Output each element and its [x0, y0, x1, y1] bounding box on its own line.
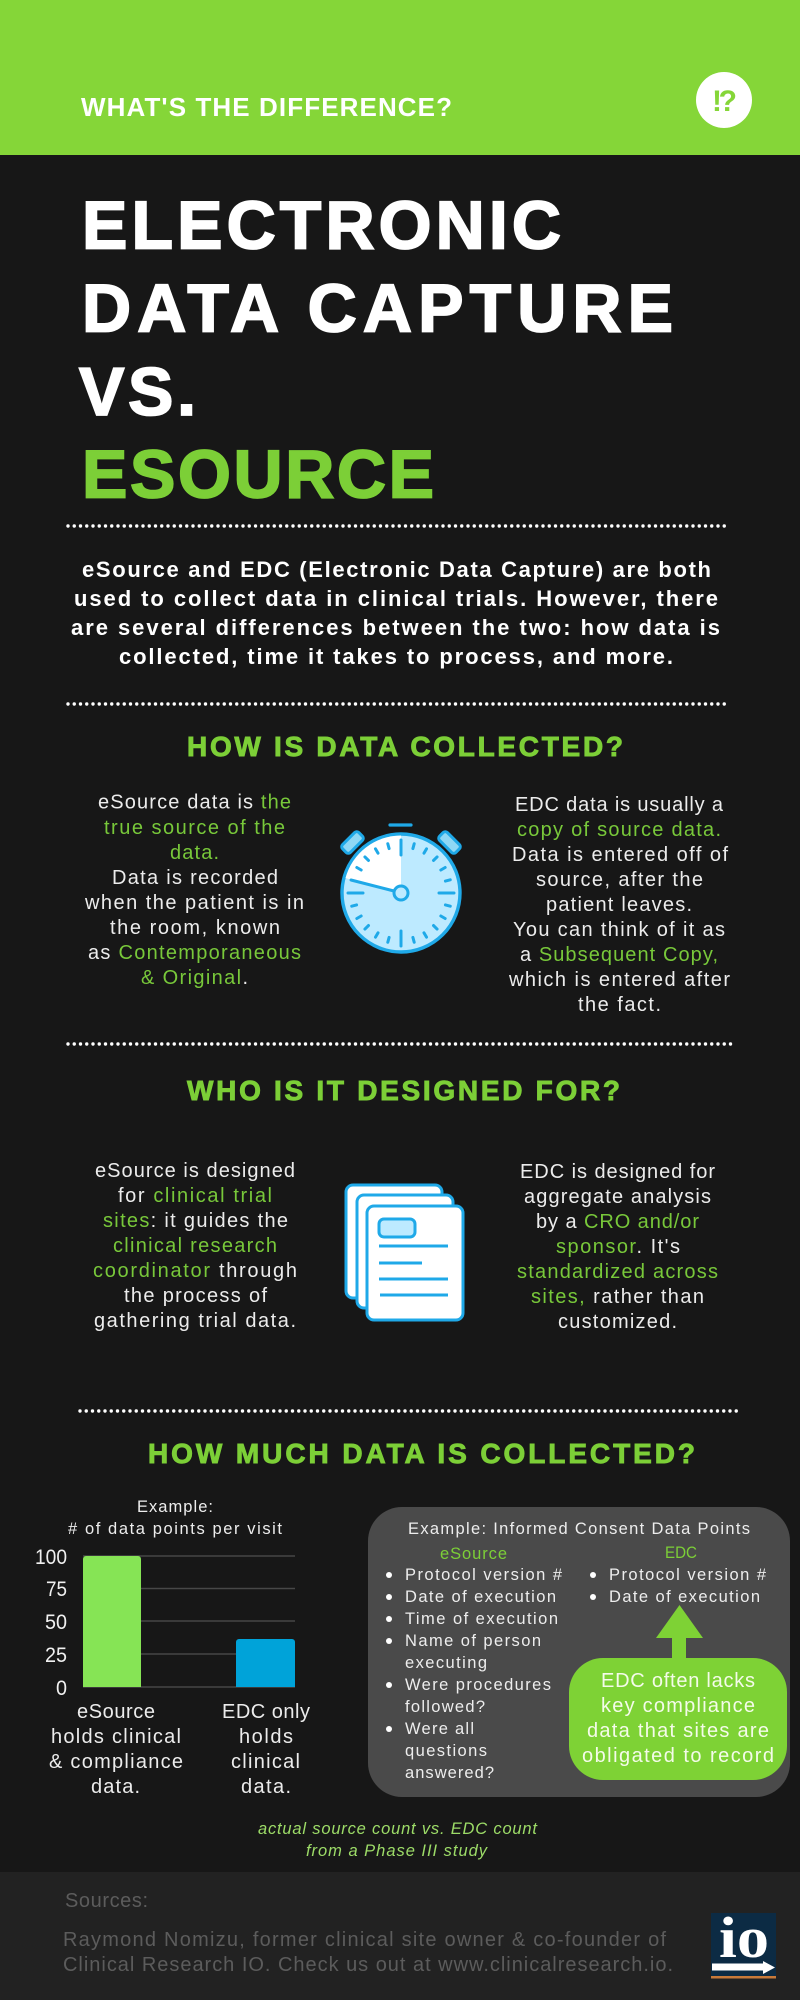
text block: eSource audience: gathering trial data.	[94, 1310, 296, 1332]
list: EDC data points: Date of execution	[609, 1588, 760, 1606]
list: EDC data points	[590, 1566, 767, 1606]
bar label: EDC: data.	[241, 1776, 291, 1798]
axis labels	[35, 1546, 67, 1700]
list: eSource data points: questions	[405, 1742, 487, 1760]
icon: exclamation question badge: !?	[712, 85, 737, 118]
main title: ESOURCE	[82, 436, 434, 512]
callout: EDC lacks compliance data: data that sites are	[587, 1720, 769, 1742]
axis labels: 75	[46, 1578, 67, 1601]
column heading: eSource: eSource	[440, 1545, 507, 1563]
text block: eSource data collection: the room, known	[110, 917, 280, 939]
text block: EDC data collection: EDC data is usually a	[515, 794, 724, 816]
text block: eSource data collection: Data is recorded	[112, 867, 278, 889]
bar label: eSource: data.	[91, 1776, 140, 1798]
text block: EDC audience: aggregate analysis	[524, 1186, 711, 1208]
text block: eSource data collection: data.	[170, 842, 219, 864]
bar label: EDC: holds	[239, 1726, 293, 1748]
chart caption	[68, 1498, 282, 1538]
panel title: Example: Informed Consent Data Points	[408, 1520, 750, 1538]
list: eSource data points: executing	[405, 1654, 487, 1672]
text block: eSource audience	[93, 1160, 297, 1332]
list: eSource data points: answered?	[405, 1764, 494, 1782]
text block: EDC audience: sites, rather than	[531, 1286, 704, 1308]
axis labels: 25	[45, 1644, 67, 1667]
text block: eSource data collection: when the patient is in	[84, 892, 304, 914]
header band	[0, 0, 800, 155]
chart footnote	[258, 1820, 538, 1860]
chart caption: # of data points per visit	[68, 1520, 282, 1538]
list: eSource data points: followed?	[405, 1698, 485, 1716]
axis labels: 0	[56, 1677, 67, 1700]
arrow: up to EDC list	[656, 1605, 703, 1660]
text block: EDC data collection: the fact.	[578, 994, 661, 1016]
text block: eSource audience: the process of	[124, 1285, 267, 1307]
text block: eSource audience: clinical research	[113, 1235, 277, 1257]
sources text	[63, 1890, 673, 1976]
main title: DATA CAPTURE	[82, 270, 673, 346]
text block: eSource data collection: true source of the	[104, 817, 285, 839]
panel: informed consent data points	[368, 1507, 790, 1797]
icon: clinical research io logo: io	[719, 1905, 769, 1970]
heading: who is it designed for: WHO IS IT DESIGNED FOR?	[187, 1075, 620, 1106]
callout: EDC lacks compliance data	[569, 1658, 787, 1780]
text block: eSource data collection: as Contemporaneous	[88, 942, 301, 964]
text block: EDC audience	[517, 1161, 718, 1333]
text block: EDC data collection: You can think of it as	[513, 919, 725, 941]
chart caption: Example:	[137, 1498, 213, 1516]
text block: eSource audience: coordinator through	[93, 1260, 297, 1282]
text block: EDC data collection: copy of source data.	[517, 819, 721, 841]
axis labels: 100	[35, 1546, 67, 1569]
bar label: eSource	[49, 1701, 183, 1798]
intro paragraph: eSource and EDC (Electronic Data Capture) are both	[82, 557, 711, 582]
main title: ELECTRONIC	[82, 188, 561, 264]
bar: EDC	[236, 1639, 295, 1687]
text block: eSource audience: sites: it guides the	[103, 1210, 288, 1232]
icon: stopwatch	[340, 825, 462, 952]
axis labels: 50	[45, 1611, 67, 1634]
heading: how much data is collected: HOW MUCH DATA IS COLLECTED?	[148, 1438, 695, 1469]
text block: EDC audience: EDC is designed for	[520, 1161, 715, 1183]
bar label: EDC	[222, 1701, 310, 1798]
bar label: EDC: clinical	[231, 1751, 300, 1773]
icon: clinical research io logo	[711, 1905, 776, 1978]
text block: EDC data collection: which is entered after	[508, 969, 730, 991]
intro paragraph	[71, 557, 720, 669]
text block: eSource data collection	[84, 792, 304, 989]
text block: EDC data collection: patient leaves.	[546, 894, 692, 916]
list: eSource data points: Date of execution	[405, 1588, 556, 1606]
intro paragraph: are several differences between the two: how data is	[71, 615, 720, 640]
main title	[79, 188, 673, 512]
list: eSource data points: Were procedures	[405, 1676, 551, 1694]
column heading: EDC: EDC	[665, 1544, 697, 1562]
text block: eSource audience: for clinical trial	[118, 1185, 272, 1207]
text block: EDC audience: standardized across	[517, 1261, 718, 1283]
intro paragraph: used to collect data in clinical trials. However, there	[74, 586, 718, 611]
bar label: eSource: & compliance	[49, 1751, 183, 1773]
bar label: eSource: eSource	[77, 1701, 155, 1723]
list: eSource data points: Name of person	[405, 1632, 541, 1650]
text block: eSource data collection: eSource data is the	[98, 792, 291, 814]
footer	[0, 1872, 800, 2000]
text block: EDC data collection: a Subsequent Copy,	[520, 944, 718, 966]
chart footnote: actual source count vs. EDC count	[258, 1820, 538, 1838]
text block: eSource data collection: & Original.	[141, 967, 248, 989]
bar: eSource	[83, 1556, 141, 1687]
sources text: Sources:	[65, 1890, 148, 1912]
main title: VS.	[79, 354, 196, 430]
bar label: EDC: EDC only	[222, 1701, 310, 1723]
intro paragraph: collected, time it takes to process, and more.	[119, 644, 673, 669]
list: eSource data points: Protocol version #	[405, 1566, 563, 1584]
icon: exclamation question badge	[696, 72, 752, 128]
text block: EDC audience: customized.	[558, 1311, 677, 1333]
list: eSource data points: Time of execution	[405, 1610, 558, 1628]
kicker heading: WHAT'S THE DIFFERENCE?	[81, 92, 452, 122]
list: eSource data points	[386, 1566, 563, 1782]
list: eSource data points: Were all	[405, 1720, 474, 1738]
text block: eSource audience: eSource is designed	[95, 1160, 295, 1182]
text block: EDC data collection: source, after the	[536, 869, 703, 891]
sources text: Raymond Nomizu, former clinical site owner & co-founder of	[63, 1929, 666, 1951]
text block: EDC data collection	[508, 794, 730, 1016]
chart footnote: from a Phase III study	[306, 1842, 489, 1860]
callout: EDC lacks compliance data: key compliance	[601, 1695, 755, 1717]
bar label: eSource: holds clinical	[51, 1726, 181, 1748]
text block: EDC data collection: Data is entered off of	[512, 844, 728, 866]
heading: how is data collected: HOW IS DATA COLLECTED?	[187, 731, 623, 762]
bar chart: data points per visit	[35, 1546, 295, 1700]
icon: stacked documents	[346, 1185, 463, 1320]
callout: EDC lacks compliance data: obligated to record	[582, 1745, 774, 1767]
list: EDC data points: Protocol version #	[609, 1566, 767, 1584]
callout: EDC lacks compliance data: EDC often lacks	[601, 1670, 755, 1692]
sources text: Clinical Research IO. Check us out at www.clinicalresearch.io.	[63, 1954, 673, 1976]
text block: EDC audience: sponsor. It's	[556, 1236, 680, 1258]
text block: EDC audience: by a CRO and/or	[536, 1211, 699, 1233]
